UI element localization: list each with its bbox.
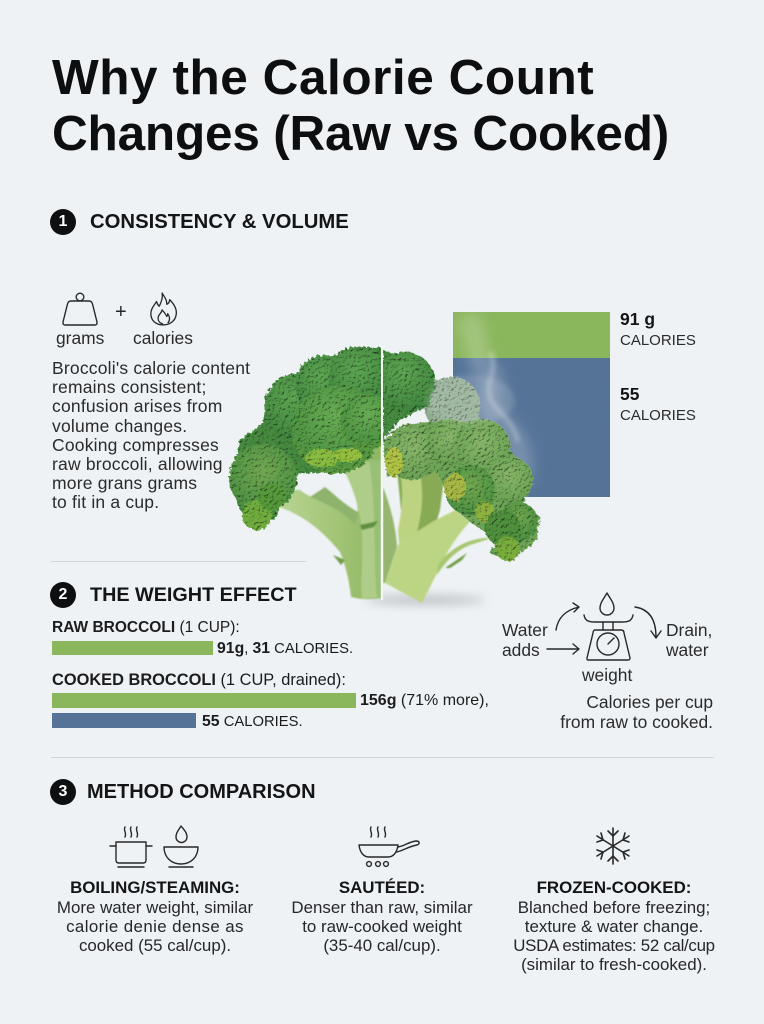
icon: calories flame (150, 292, 177, 326)
text: explanation (52, 358, 250, 512)
text: calories per cup: Calories per cup (586, 692, 713, 712)
broccoli illustration (228, 346, 541, 610)
method: boiling / steaming: cooked (55 cal/cup). (79, 936, 231, 955)
55 chart label (620, 384, 696, 424)
cooked weight value: 156g (71% more), (360, 692, 489, 709)
text: explanation: more grans grams (52, 473, 197, 493)
raw value: 91g, 31 CALORIES. (217, 640, 353, 657)
method: sauteed: SAUTÉED: (339, 878, 425, 897)
91 g chart label: 91 g (620, 309, 655, 329)
cooked back florets (375, 350, 480, 440)
text: water adds (502, 620, 548, 660)
green block (453, 312, 610, 358)
grams label: grams (56, 328, 104, 348)
raw half (229, 347, 396, 599)
text: water adds: Water (502, 620, 548, 640)
cooked half (375, 350, 540, 603)
method: sauteed (291, 878, 473, 955)
text: explanation: remains consistent; (52, 377, 207, 397)
text: explanation: Broccoli's calorie content (52, 358, 250, 378)
icon: grams weight (62, 292, 98, 326)
method: boiling / steaming (57, 878, 253, 955)
cooked calorie bar (52, 713, 196, 728)
91 g chart label (620, 309, 696, 349)
cooked label: COOKED BROCCOLI (1 CUP, drained): (52, 671, 346, 689)
section 2 heading: THE WEIGHT EFFECT (90, 584, 297, 606)
method: boiling / steaming: BOILING/STEAMING: (70, 878, 240, 897)
raw label: RAW BROCCOLI (1 CUP): (52, 619, 240, 636)
text: explanation: confusion arises from (52, 396, 223, 416)
icon: frying pan (358, 826, 420, 868)
method: boiling / steaming: calorie denie dense as (66, 917, 244, 936)
55 chart label: 55 (620, 384, 639, 404)
text: drain water: Drain, (666, 620, 712, 640)
text: drain water: water (666, 640, 709, 660)
raw stem (272, 445, 381, 599)
rule (51, 561, 306, 562)
title: Why the Calorie Count (52, 50, 594, 105)
title: Changes (Raw vs Cooked) (52, 106, 669, 160)
cooked florets (383, 419, 540, 562)
text: explanation: volume changes. (52, 416, 187, 436)
section 2 heading: 2 (59, 586, 67, 603)
cooked weight bar (52, 693, 356, 708)
text: drain water (666, 620, 712, 660)
text: explanation: raw broccoli, allowing (52, 454, 223, 474)
icon: pot and bowl (109, 825, 199, 868)
method: sauteed: to raw-cooked weight (302, 917, 462, 936)
text: weight: weight (582, 665, 632, 685)
text: calories per cup (560, 692, 713, 732)
method: frozen-cooked: (similar to fresh-cooked). (521, 955, 707, 974)
text: explanation: to fit in a cup. (52, 492, 159, 512)
rule (51, 757, 714, 758)
raw bar (52, 641, 213, 655)
method: frozen-cooked: USDA estimates: 52 cal/cup (513, 936, 715, 955)
cooked stem (383, 470, 492, 603)
text: water adds: adds (502, 640, 540, 660)
steam haze on cooked florets (425, 375, 515, 425)
section 3 heading: 3 (59, 783, 67, 800)
steam over chart (456, 312, 537, 482)
91 g chart label: CALORIES (620, 332, 696, 349)
cooked calorie value: 55 CALORIES. (202, 713, 303, 730)
section 1 heading: 1 (59, 213, 67, 230)
icon: snowflake (596, 827, 630, 865)
plus sign: + (115, 301, 127, 323)
method: frozen-cooked: FROZEN-COOKED: (537, 878, 691, 897)
raw florets (229, 347, 396, 530)
cooked broccoli row (52, 671, 489, 730)
method: frozen-cooked (513, 878, 715, 974)
raw broccoli row (52, 619, 353, 657)
method: frozen-cooked: Blanched before freezing; (518, 898, 710, 917)
text: calories per cup: from raw to cooked. (560, 712, 713, 732)
ground shadow (365, 595, 485, 605)
icon: water and scale diagram (546, 592, 662, 661)
55 chart label: CALORIES (620, 407, 696, 424)
method: boiling / steaming: More water weight, similar (57, 898, 253, 917)
section 1 heading: CONSISTENCY & VOLUME (90, 211, 349, 233)
chart: stacked calorie block (453, 312, 610, 497)
section 3 heading: METHOD COMPARISON (87, 781, 316, 803)
center divider (381, 346, 383, 600)
method: frozen-cooked: texture & water change. (525, 917, 703, 936)
text: explanation: Cooking compresses (52, 435, 219, 455)
calories label: calories (133, 328, 193, 348)
method: sauteed: Denser than raw, similar (291, 898, 473, 917)
title (52, 50, 669, 160)
method: sauteed: (35-40 cal/cup). (323, 936, 441, 955)
